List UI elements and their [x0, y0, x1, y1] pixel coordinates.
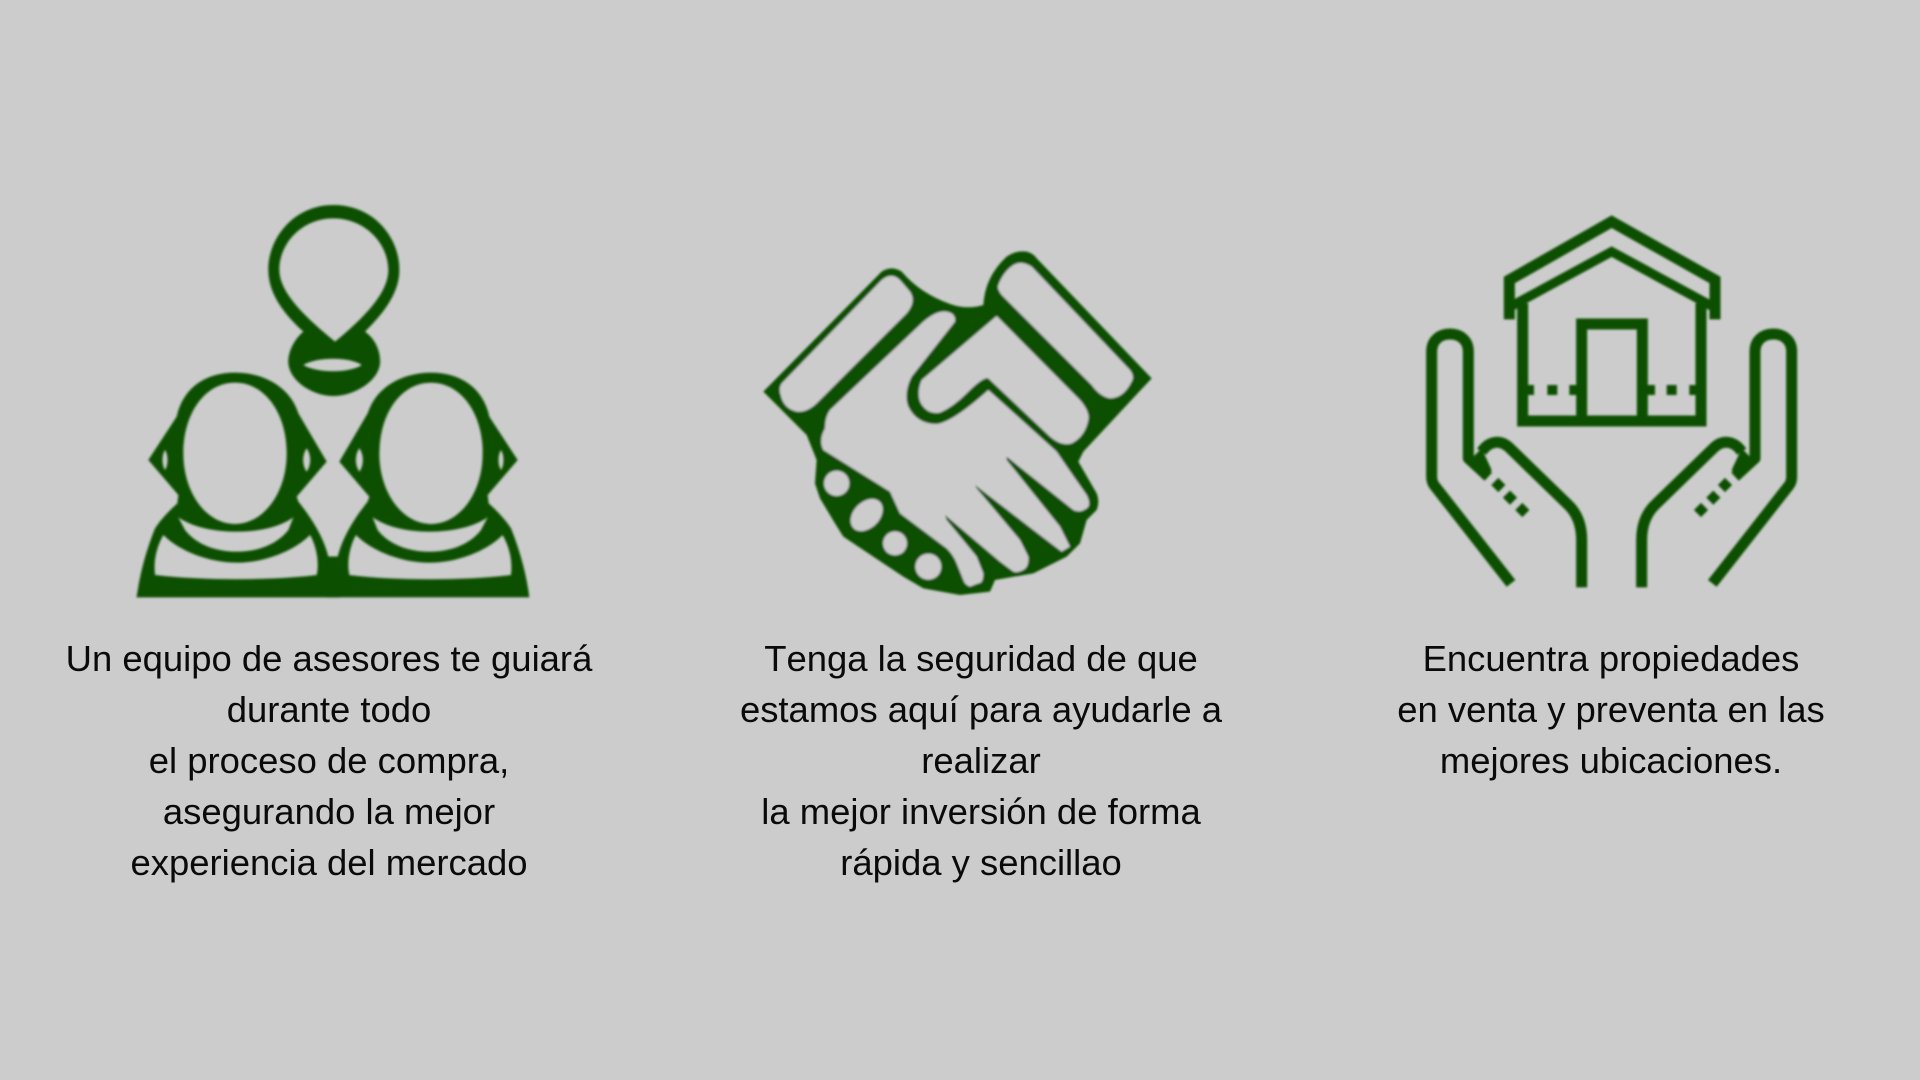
light bulb	[268, 205, 399, 396]
text block: properties: Encuentra propiedades	[1423, 638, 1799, 679]
text block: advisors: el proceso de compra,	[149, 740, 509, 781]
text block: advisors: experiencia del mercado	[130, 842, 528, 883]
handshake silhouette	[763, 251, 1152, 595]
text block: properties	[1397, 638, 1825, 781]
right hand	[1642, 334, 1792, 587]
icon: two advisors with light bulb	[137, 205, 529, 597]
text block: advisors: Un equipo de asesores te guiará	[66, 638, 592, 679]
text block: advisors: durante todo	[227, 689, 431, 730]
left hand	[1432, 334, 1582, 587]
text block: properties: en venta y preventa en las	[1397, 689, 1825, 730]
text block: security	[740, 638, 1222, 883]
door-side dots	[1527, 385, 1697, 395]
house roof	[1509, 222, 1715, 319]
left advisor	[137, 373, 340, 597]
right advisor	[326, 373, 529, 597]
text block: security: la mejor inversión de forma	[761, 791, 1201, 832]
text block: security: Tenga la seguridad de que	[764, 638, 1198, 679]
icon: handshake	[763, 251, 1152, 595]
text block: security: realizar	[921, 740, 1041, 781]
text block: security: estamos aquí para ayudarle a	[740, 689, 1222, 730]
house walls	[1523, 303, 1701, 421]
cuff openings, palms and knuckles	[780, 263, 1133, 587]
icon: hands holding a house	[1432, 222, 1792, 587]
text block: properties: mejores ubicaciones.	[1440, 740, 1782, 781]
text block: advisors	[66, 638, 592, 883]
house door	[1582, 324, 1642, 421]
text block: security: rápida y sencillao	[840, 842, 1122, 883]
text block: advisors: asegurando la mejor	[163, 791, 495, 832]
